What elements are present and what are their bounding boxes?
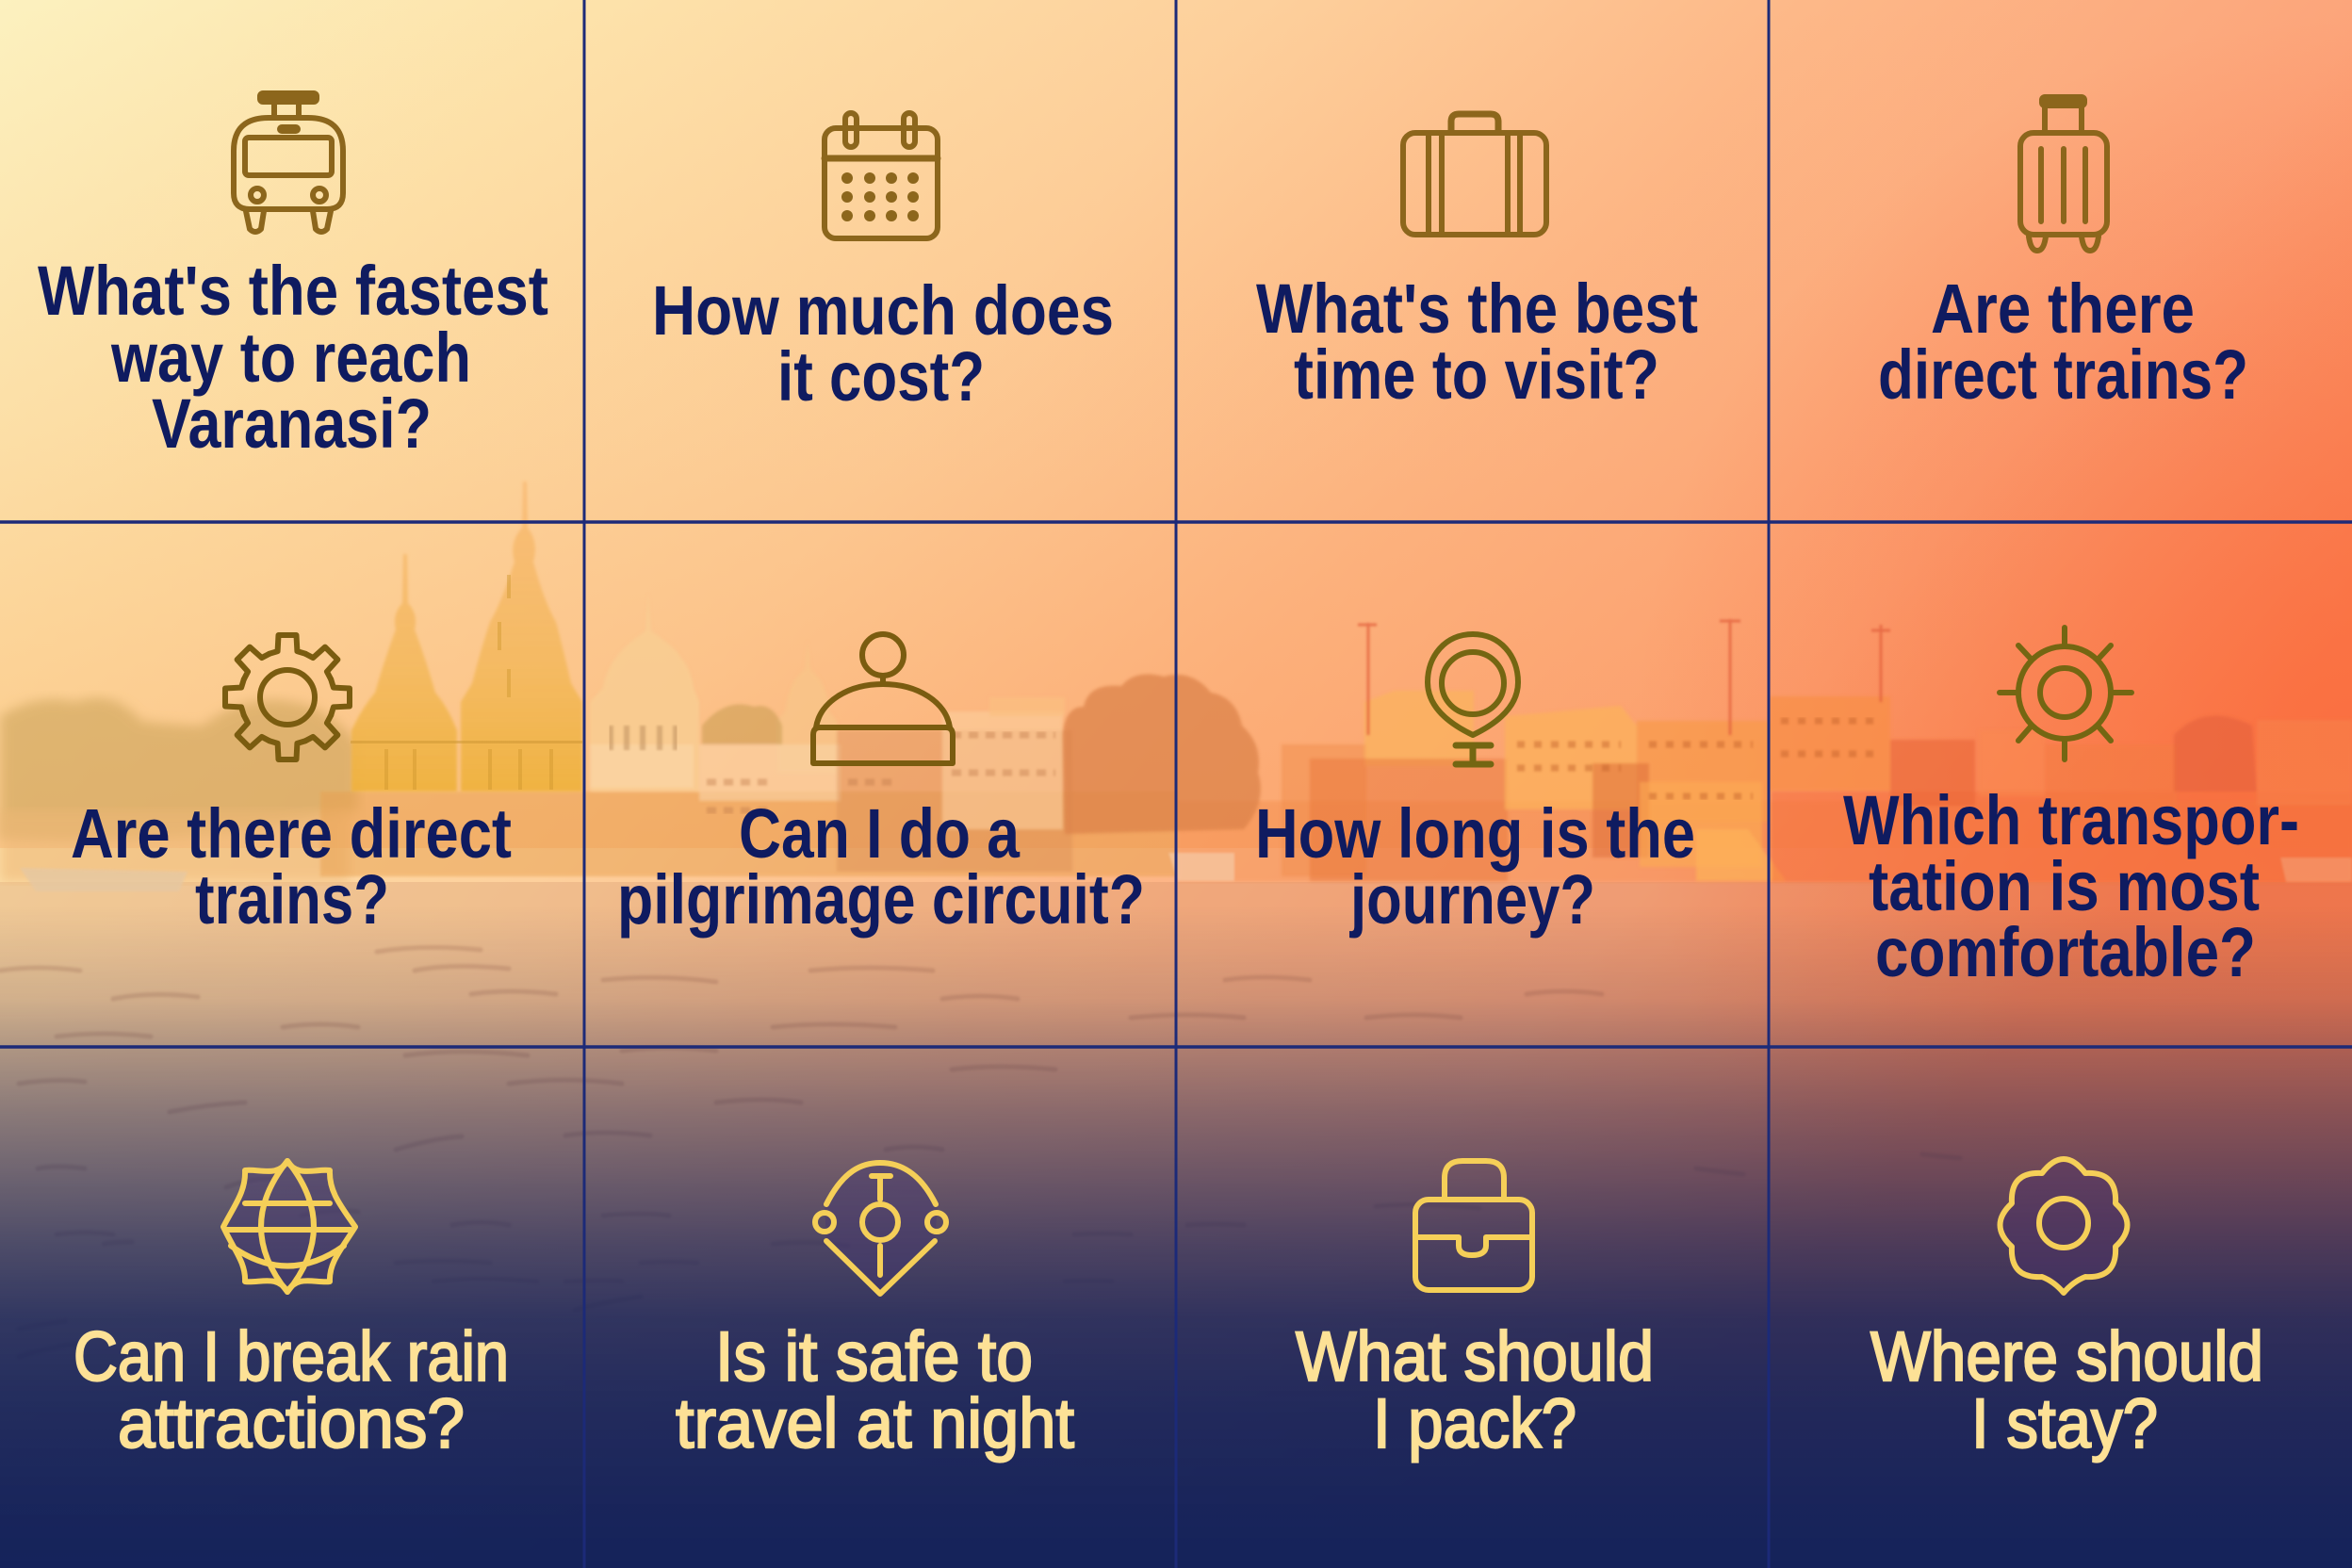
heading: comfortable? <box>1875 913 2256 991</box>
panel: packing <box>1296 1161 1654 1462</box>
heading: What's the fastest <box>38 252 548 330</box>
panel: break journey <box>74 1161 509 1462</box>
panel: journey length <box>1255 634 1695 939</box>
panel: pilgrimage circuit <box>617 634 1145 939</box>
heading: travel at night <box>676 1384 1074 1462</box>
heading: journey? <box>1348 860 1595 939</box>
heading: time to visit? <box>1294 335 1659 414</box>
heading: What should <box>1296 1317 1654 1396</box>
heading: How much does <box>652 271 1114 350</box>
heading: Is it safe to <box>715 1317 1033 1396</box>
icon: gear <box>225 635 350 760</box>
ghat buildings <box>1282 691 2352 882</box>
river ripples <box>0 947 1960 1357</box>
heading <box>1878 270 2248 414</box>
mosque domes and palace <box>590 594 1072 872</box>
distant trees on the left <box>0 697 358 841</box>
heading: I stay? <box>1971 1384 2158 1462</box>
panel: direct trains 2 <box>71 635 512 939</box>
heading: Where should <box>1870 1317 2263 1396</box>
heading: Are there direct <box>71 794 512 873</box>
panel: night safety <box>676 1161 1074 1462</box>
icon: globe <box>223 1161 355 1292</box>
heading <box>652 271 1114 416</box>
heading: pilgrimage circuit? <box>617 860 1145 939</box>
icon: bag <box>1415 1161 1532 1290</box>
panel: cost <box>652 113 1114 416</box>
heading <box>71 794 512 939</box>
heading: How long is the <box>1255 794 1695 873</box>
panel: best time <box>1256 114 1698 414</box>
heading: I pack? <box>1373 1384 1576 1462</box>
heading: direct trains? <box>1878 335 2248 414</box>
icon: calendar <box>825 113 938 238</box>
heading <box>676 1317 1074 1462</box>
panel: direct trains <box>1878 97 2248 414</box>
heading: way to reach <box>110 318 471 397</box>
left riverbank haze <box>0 810 349 882</box>
icon: compass diamond <box>815 1161 946 1296</box>
large tree <box>1063 675 1261 834</box>
icon: globe pin <box>1428 634 1518 764</box>
icon: train <box>234 93 343 232</box>
heading: trains? <box>195 860 389 939</box>
riverbank <box>320 792 1178 876</box>
icon: flower <box>2000 1159 2128 1293</box>
heading <box>1296 1317 1654 1462</box>
heading: What's the best <box>1256 270 1698 348</box>
icon: briefcase <box>1403 114 1546 235</box>
heading <box>1256 270 1698 414</box>
panel: most comfortable <box>1843 628 2299 991</box>
panel: fastest way <box>38 93 548 463</box>
heading: Varanasi? <box>152 384 432 463</box>
icon: person <box>813 634 953 763</box>
background photo: Varanasi ghats skyline and river <box>0 482 2352 1568</box>
large temple spires <box>351 482 582 792</box>
heading <box>38 252 548 463</box>
heading <box>1843 781 2299 991</box>
heading <box>617 794 1145 939</box>
heading: Are there <box>1931 270 2195 348</box>
icon: sun wheel <box>2000 628 2132 760</box>
heading: Can I break rain <box>74 1317 509 1396</box>
heading: tation is most <box>1869 847 2260 925</box>
panel: where to stay <box>1870 1159 2263 1462</box>
heading <box>1255 794 1695 939</box>
heading <box>74 1317 509 1462</box>
heading: Can I do a <box>739 794 1021 873</box>
heading: it cost? <box>777 337 985 416</box>
light poles <box>1358 619 1890 735</box>
icon: suitcase <box>2020 97 2107 251</box>
heading <box>1870 1317 2263 1462</box>
heading: attractions? <box>118 1384 465 1462</box>
navy water gradient overlay <box>0 848 2352 1568</box>
river water <box>0 882 2352 1568</box>
boats <box>20 868 188 891</box>
